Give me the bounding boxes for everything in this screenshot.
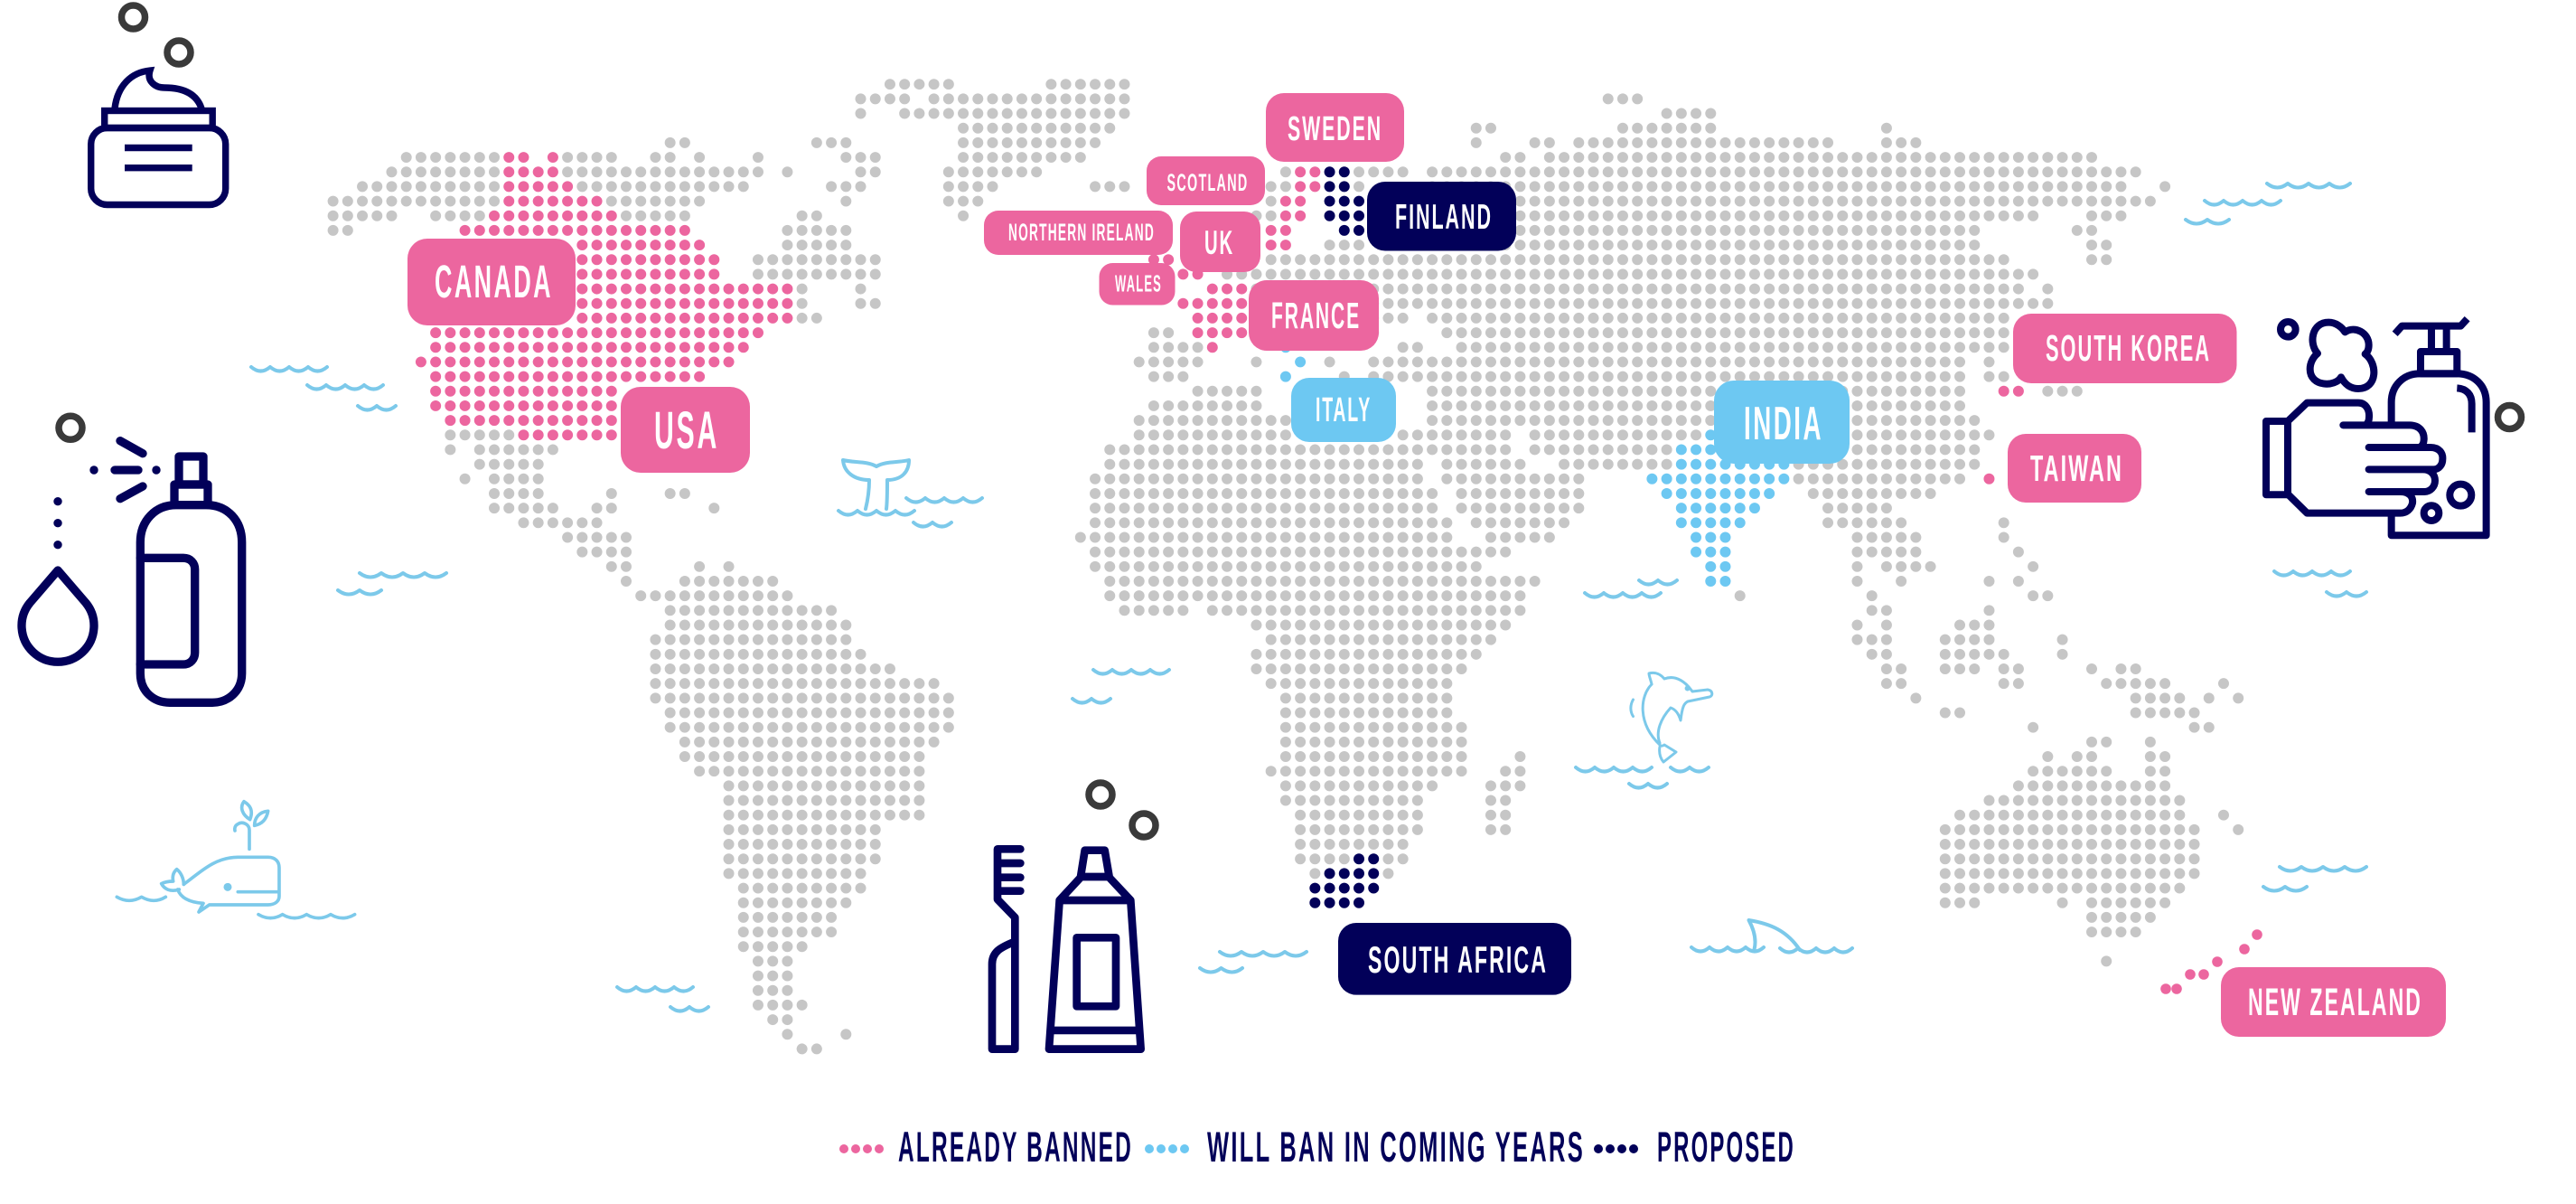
map dots: will ban (blue) [1286, 347, 1785, 581]
label: New Zealand: NEW ZEALAND [2248, 981, 2422, 1024]
label: Sweden [1266, 93, 1404, 162]
label: USA: USA [654, 401, 719, 460]
label: Wales [1099, 263, 1175, 306]
legend: will ban in coming years [1145, 1123, 1585, 1171]
ocean waves [251, 183, 2366, 1011]
legend: will ban in coming years: WILL BAN IN COMING YEARS [1207, 1123, 1585, 1171]
label: UK [1180, 212, 1260, 272]
icon: cream jar [91, 5, 226, 204]
label: Italy [1291, 378, 1396, 442]
label: Wales: WALES [1115, 269, 1162, 296]
label: USA [621, 387, 750, 473]
icon: whale tail [843, 460, 909, 509]
label: France: FRANCE [1271, 295, 1361, 336]
icon: dolphin [1631, 673, 1712, 762]
label: France [1249, 280, 1379, 351]
legend: proposed [1594, 1123, 1795, 1171]
legend: already banned [839, 1123, 1133, 1171]
label: New Zealand [2221, 967, 2446, 1037]
label: India: INDIA [1744, 398, 1823, 450]
label: Canada: CANADA [435, 256, 553, 307]
legend: already banned: ALREADY BANNED [898, 1123, 1133, 1171]
label: Finland: FINLAND [1395, 198, 1493, 237]
label: Scotland: SCOTLAND [1167, 169, 1249, 196]
label: Scotland [1147, 156, 1265, 205]
label: Italy: ITALY [1316, 391, 1372, 429]
icon: hand and soap dispenser [2266, 319, 2521, 535]
label: Taiwan [2008, 434, 2141, 503]
label: Northern Ireland: NORTHERN IRELAND [1008, 219, 1155, 246]
label: South Korea: SOUTH KOREA [2046, 327, 2211, 369]
label: Canada [407, 239, 576, 325]
legend: proposed: PROPOSED [1657, 1123, 1795, 1171]
legend [839, 1123, 1795, 1171]
label: South Africa: SOUTH AFRICA [1368, 938, 1548, 981]
label: Sweden: SWEDEN [1288, 110, 1382, 148]
label: Finland [1367, 182, 1516, 251]
icon: whale [117, 802, 355, 918]
map dots: grey land [333, 84, 2240, 1049]
dotted world map [333, 84, 2240, 1049]
New Zealand dots [2160, 929, 2262, 994]
map dots: proposed (navy) [1315, 172, 1375, 903]
label: South Korea [2013, 314, 2237, 383]
label: Northern Ireland [984, 211, 1173, 255]
map dots: already banned (pink) [421, 157, 2020, 479]
label: UK: UK [1204, 224, 1234, 261]
icon: toothbrush and toothpaste [992, 783, 1156, 1049]
icon: spray bottle and drop [22, 416, 242, 702]
label: Taiwan: TAIWAN [2030, 447, 2123, 489]
label: India [1714, 381, 1850, 464]
icon: shark fin [1749, 920, 1800, 950]
label: South Africa [1338, 923, 1571, 995]
